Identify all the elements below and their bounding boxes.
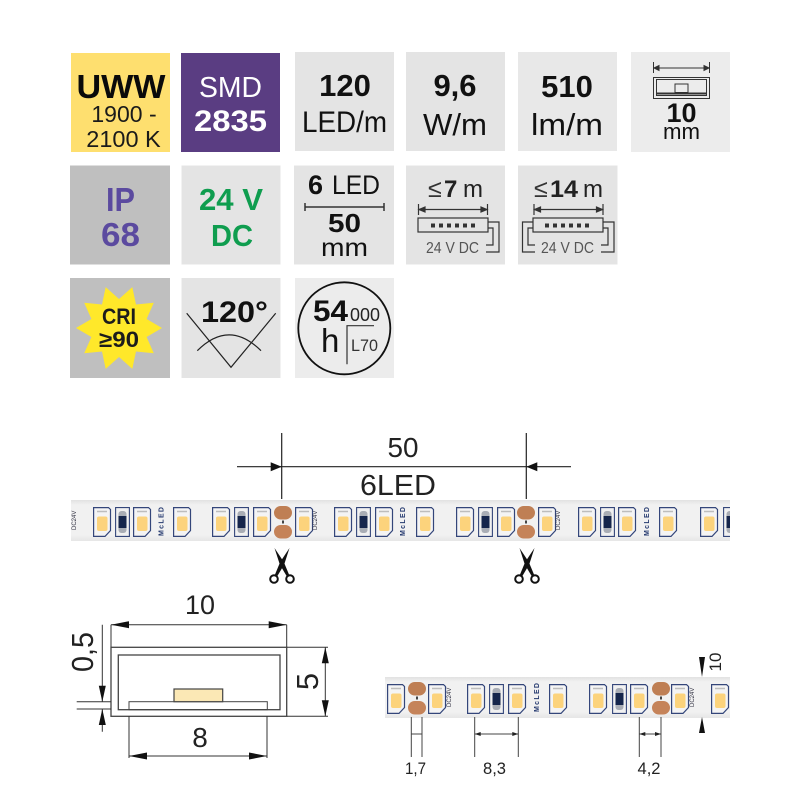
tile: 9,6 W/m: 9,6: [433, 68, 477, 103]
tile: 120 degree beam angle: 120°: [201, 296, 268, 329]
tile: IP 68: IP: [106, 181, 135, 218]
dimension: thickness 0,5: 0,5: [65, 632, 100, 672]
tile: 120 LED/m: LED/m: [302, 106, 387, 139]
icon: yellow star: [76, 287, 162, 369]
tile: max 7 m single feed: 24 V DC: [426, 240, 479, 257]
tile: max 14 m double feed: [518, 166, 618, 264]
LED strip: long view: [71, 500, 737, 541]
tile: 54000 h lifetime: 54: [313, 295, 348, 328]
dimension: 50 mm / 6 LED spacing: [237, 432, 571, 502]
cross-section drawing: [65, 590, 329, 760]
tile: 54000 h lifetime: [295, 278, 394, 378]
tile: 10 mm width: mm: [663, 119, 700, 144]
tile: 120 degree beam angle: [182, 278, 280, 378]
tile: 24 V DC: [182, 166, 280, 264]
tile: 10 mm width: 10: [666, 98, 697, 128]
icon: strip with double feed: [522, 204, 614, 252]
tile: 6 LED per 50 mm: LED: [332, 170, 380, 200]
tile: IP 68: [70, 166, 170, 264]
dimension: 50 mm / 6 LED spacing: 6LED: [360, 470, 436, 502]
LED strip: long view: DC24V: [556, 511, 562, 530]
tile: 120 LED/m: 120: [319, 68, 371, 103]
dimension: strip width 10: [699, 653, 725, 733]
tile: UWW colour temperature: 1900 -: [91, 101, 157, 127]
tile: 6 LED per 50 mm: 6: [308, 170, 323, 200]
tile: 510 lm/m: [518, 52, 617, 151]
dimension: strip width 10: 10: [706, 653, 725, 671]
tile: 6 LED per 50 mm: mm: [321, 234, 368, 262]
icon: scissors right: [515, 548, 539, 583]
dimension: 8,3: [475, 717, 518, 778]
tile: UWW colour temperature: [71, 53, 170, 152]
tile: SMD 2835: SMD: [199, 72, 262, 104]
tile: 510 lm/m: lm/m: [531, 107, 603, 142]
dimension: 1,7: 1,7: [405, 759, 426, 778]
tile: max 14 m double feed: 24 V DC: [541, 240, 594, 257]
tile: CRI 90: [70, 278, 170, 378]
LED strip: short view: DC24V: [447, 688, 453, 707]
tile: 6 LED per 50 mm: [294, 166, 394, 264]
tile: CRI 90: ≥90: [99, 327, 139, 352]
tile: 510 lm/m: 510: [541, 69, 593, 104]
LED strip: short view: McLED: [534, 683, 541, 712]
tile: 120 LED/m: [295, 52, 394, 151]
tile: 54000 h lifetime: 000: [350, 305, 380, 325]
icon: beam angle: [187, 313, 276, 367]
tile: 6 LED per 50 mm: 50: [328, 208, 361, 238]
tile: 10 mm width: [631, 52, 730, 152]
tile: 54000 h lifetime: L70: [351, 336, 378, 355]
LED strip: long view: McLED: [400, 507, 407, 536]
LED strip: long view: McLED: [158, 507, 166, 536]
dimension: 8,3: 8,3: [483, 759, 506, 778]
icon: strip cross-section: [654, 62, 710, 98]
tile: max 14 m double feed: ≤: [534, 175, 548, 203]
tile: max 7 m single feed: 7: [444, 176, 457, 203]
dimension: width 10: 10: [185, 590, 215, 620]
dimension: width 10: [111, 590, 287, 647]
tile: max 7 m single feed: ≤: [428, 175, 442, 203]
dimension: 50 mm / 6 LED spacing: 50: [388, 432, 418, 463]
LED strip: long view: DC24V: [72, 511, 78, 530]
tile: max 7 m single feed: m: [463, 176, 483, 203]
dimension: PCB width 8: 8: [192, 722, 208, 753]
dimension: 1,7: [405, 717, 426, 778]
LED strip: long view: McLED: [644, 507, 651, 536]
tile: 54000 h lifetime: h: [321, 322, 339, 359]
dimension: 4,2: [638, 717, 661, 778]
tile: max 7 m single feed: [406, 166, 505, 264]
tile: SMD 2835: 2835: [194, 105, 267, 138]
tile: SMD 2835: [181, 53, 280, 152]
tile: max 14 m double feed: m: [583, 176, 603, 203]
tile: UWW colour temperature: 2100 K: [86, 126, 161, 152]
LED strip: long view: DC24V: [313, 511, 319, 530]
tile: max 14 m double feed: 14: [550, 176, 579, 203]
tile: IP 68: 68: [101, 216, 140, 253]
tile: 24 V DC: 24 V: [199, 182, 263, 217]
tile: 9,6 W/m: [406, 52, 505, 151]
tile: 9,6 W/m: W/m: [423, 107, 487, 142]
dimension: height 5: [287, 647, 329, 716]
dimension: PCB width 8: [129, 716, 267, 760]
tile: UWW colour temperature: UWW: [76, 68, 166, 105]
dimension: thickness 0,5: [65, 625, 111, 732]
LED strip: short view: DC24V: [690, 688, 696, 707]
dimension: 4,2: 4,2: [638, 759, 660, 778]
dimension: height 5: 5: [290, 673, 325, 690]
LED strip: short view: [385, 677, 730, 718]
icon: strip with single feed: [418, 204, 499, 252]
tile: 24 V DC: DC: [211, 218, 253, 253]
tile: CRI 90: CRI: [102, 304, 136, 329]
icon: scissors left: [270, 548, 294, 583]
